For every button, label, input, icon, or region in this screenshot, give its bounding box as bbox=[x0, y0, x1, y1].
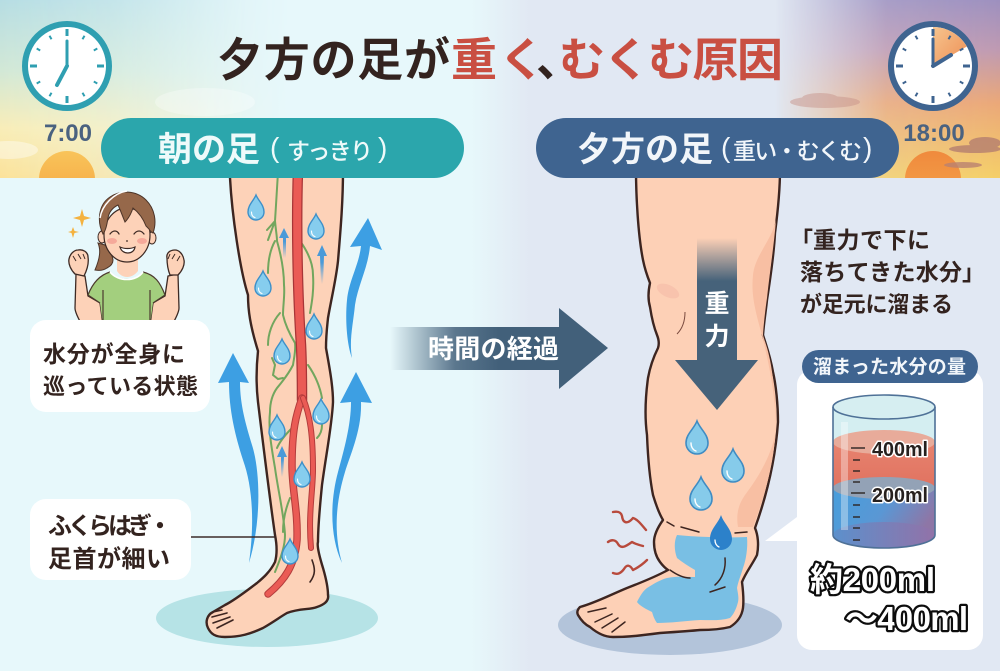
fists bbox=[69, 250, 88, 276]
clock: 18:00 bbox=[891, 24, 975, 108]
speech bubble: thin calf and ankle bbox=[30, 499, 191, 580]
speech bubble: water circulating: 水分が全身に bbox=[43, 341, 185, 367]
speech bubble: thin calf and ankle: ふくらはぎ・ bbox=[48, 512, 172, 540]
water drops bbox=[248, 195, 329, 564]
evening sky band bbox=[775, 0, 1000, 178]
panel body with callout tail bbox=[765, 370, 983, 650]
beaker: 200ml bbox=[872, 485, 928, 507]
small flow arrows bbox=[277, 228, 327, 477]
amount text: 約200ml bbox=[810, 561, 935, 598]
beaker bbox=[833, 395, 935, 548]
gravity explanation text bbox=[790, 227, 985, 317]
ponytail bbox=[95, 243, 113, 270]
panel: accumulated water amount bbox=[765, 350, 983, 650]
time label 18:00: 18:00 bbox=[903, 120, 965, 147]
morning sun bbox=[39, 151, 95, 178]
title bbox=[217, 34, 783, 86]
shirt bbox=[88, 272, 165, 325]
beaker: 400ml bbox=[872, 439, 928, 461]
toes and ankle bbox=[212, 560, 314, 628]
title: 、 bbox=[536, 34, 582, 86]
neck bbox=[117, 255, 138, 277]
time label 7:00: 7:00 bbox=[44, 120, 92, 147]
smiling woman bbox=[68, 191, 184, 325]
sock mark, folds and toes bbox=[588, 522, 747, 632]
amount text: ～400ml bbox=[845, 600, 968, 637]
knee blush bbox=[655, 280, 681, 302]
ground shadow bbox=[558, 595, 782, 655]
leg shading bbox=[737, 220, 776, 527]
title: 夕方の足が bbox=[217, 34, 450, 86]
title: 重く bbox=[451, 34, 545, 86]
leg outline bbox=[207, 170, 343, 637]
panel: accumulated water amount: 溜まった水分の量 bbox=[813, 356, 966, 378]
pill header: morning: すっきり bbox=[287, 138, 373, 164]
gravity explanation text: 」 bbox=[962, 259, 985, 285]
time passage arrow bbox=[390, 308, 608, 389]
pooled water bbox=[637, 535, 747, 623]
arrow: right lower bbox=[332, 372, 372, 563]
clock: 7:00 bbox=[25, 24, 109, 108]
face bbox=[110, 231, 144, 234]
evening leg illustration bbox=[558, 170, 782, 655]
pain squiggles bbox=[608, 512, 647, 574]
amount text bbox=[810, 561, 968, 637]
gravity arrow: 力 bbox=[704, 323, 730, 351]
time passage arrow: 時間の経過 bbox=[428, 334, 559, 364]
pill header: evening bbox=[536, 118, 899, 178]
arms bbox=[75, 274, 103, 325]
water drops bbox=[686, 421, 744, 550]
pill header: morning bbox=[101, 118, 464, 178]
morning leg illustration bbox=[156, 170, 378, 647]
pill header: evening: ( bbox=[721, 132, 731, 163]
gravity arrow: 重 bbox=[704, 290, 730, 318]
artery bbox=[268, 170, 313, 594]
sparkles bbox=[73, 209, 91, 227]
head bbox=[98, 231, 106, 243]
title: むくむ原因 bbox=[559, 34, 783, 86]
green veins bbox=[267, 172, 322, 572]
pill header: evening: 重い・むくむ bbox=[733, 138, 862, 164]
panel heading bbox=[802, 350, 978, 383]
pill header: evening: ) bbox=[863, 132, 872, 163]
leader line bbox=[191, 536, 275, 538]
pill header: morning: 朝の足 bbox=[158, 131, 260, 169]
speech bubble: water circulating: 巡っている状態 bbox=[43, 374, 198, 399]
speech bubble: water circulating bbox=[30, 320, 210, 412]
pill header: morning: ) bbox=[378, 132, 387, 163]
ground shadow bbox=[156, 589, 378, 647]
speech bubble: thin calf and ankle: 足首が細い bbox=[48, 545, 170, 573]
evening sun bbox=[905, 151, 982, 178]
pill header: evening: 夕方の足 bbox=[577, 131, 713, 169]
big upward arrows bbox=[218, 218, 382, 563]
gravity arrow bbox=[675, 238, 758, 410]
gravity explanation text: が足元に溜まる bbox=[800, 292, 953, 317]
gravity explanation text: 重力で下に bbox=[813, 227, 930, 253]
hair bbox=[99, 192, 155, 234]
arrow: right upper bbox=[346, 218, 382, 358]
arrow: left bbox=[218, 353, 258, 563]
gravity explanation text: 落ちてきた水分 bbox=[800, 259, 962, 285]
morning sky band bbox=[0, 0, 240, 178]
swollen leg outline bbox=[577, 170, 780, 637]
pill header: morning: ( bbox=[270, 132, 280, 163]
gravity explanation text: 「 bbox=[790, 227, 813, 253]
